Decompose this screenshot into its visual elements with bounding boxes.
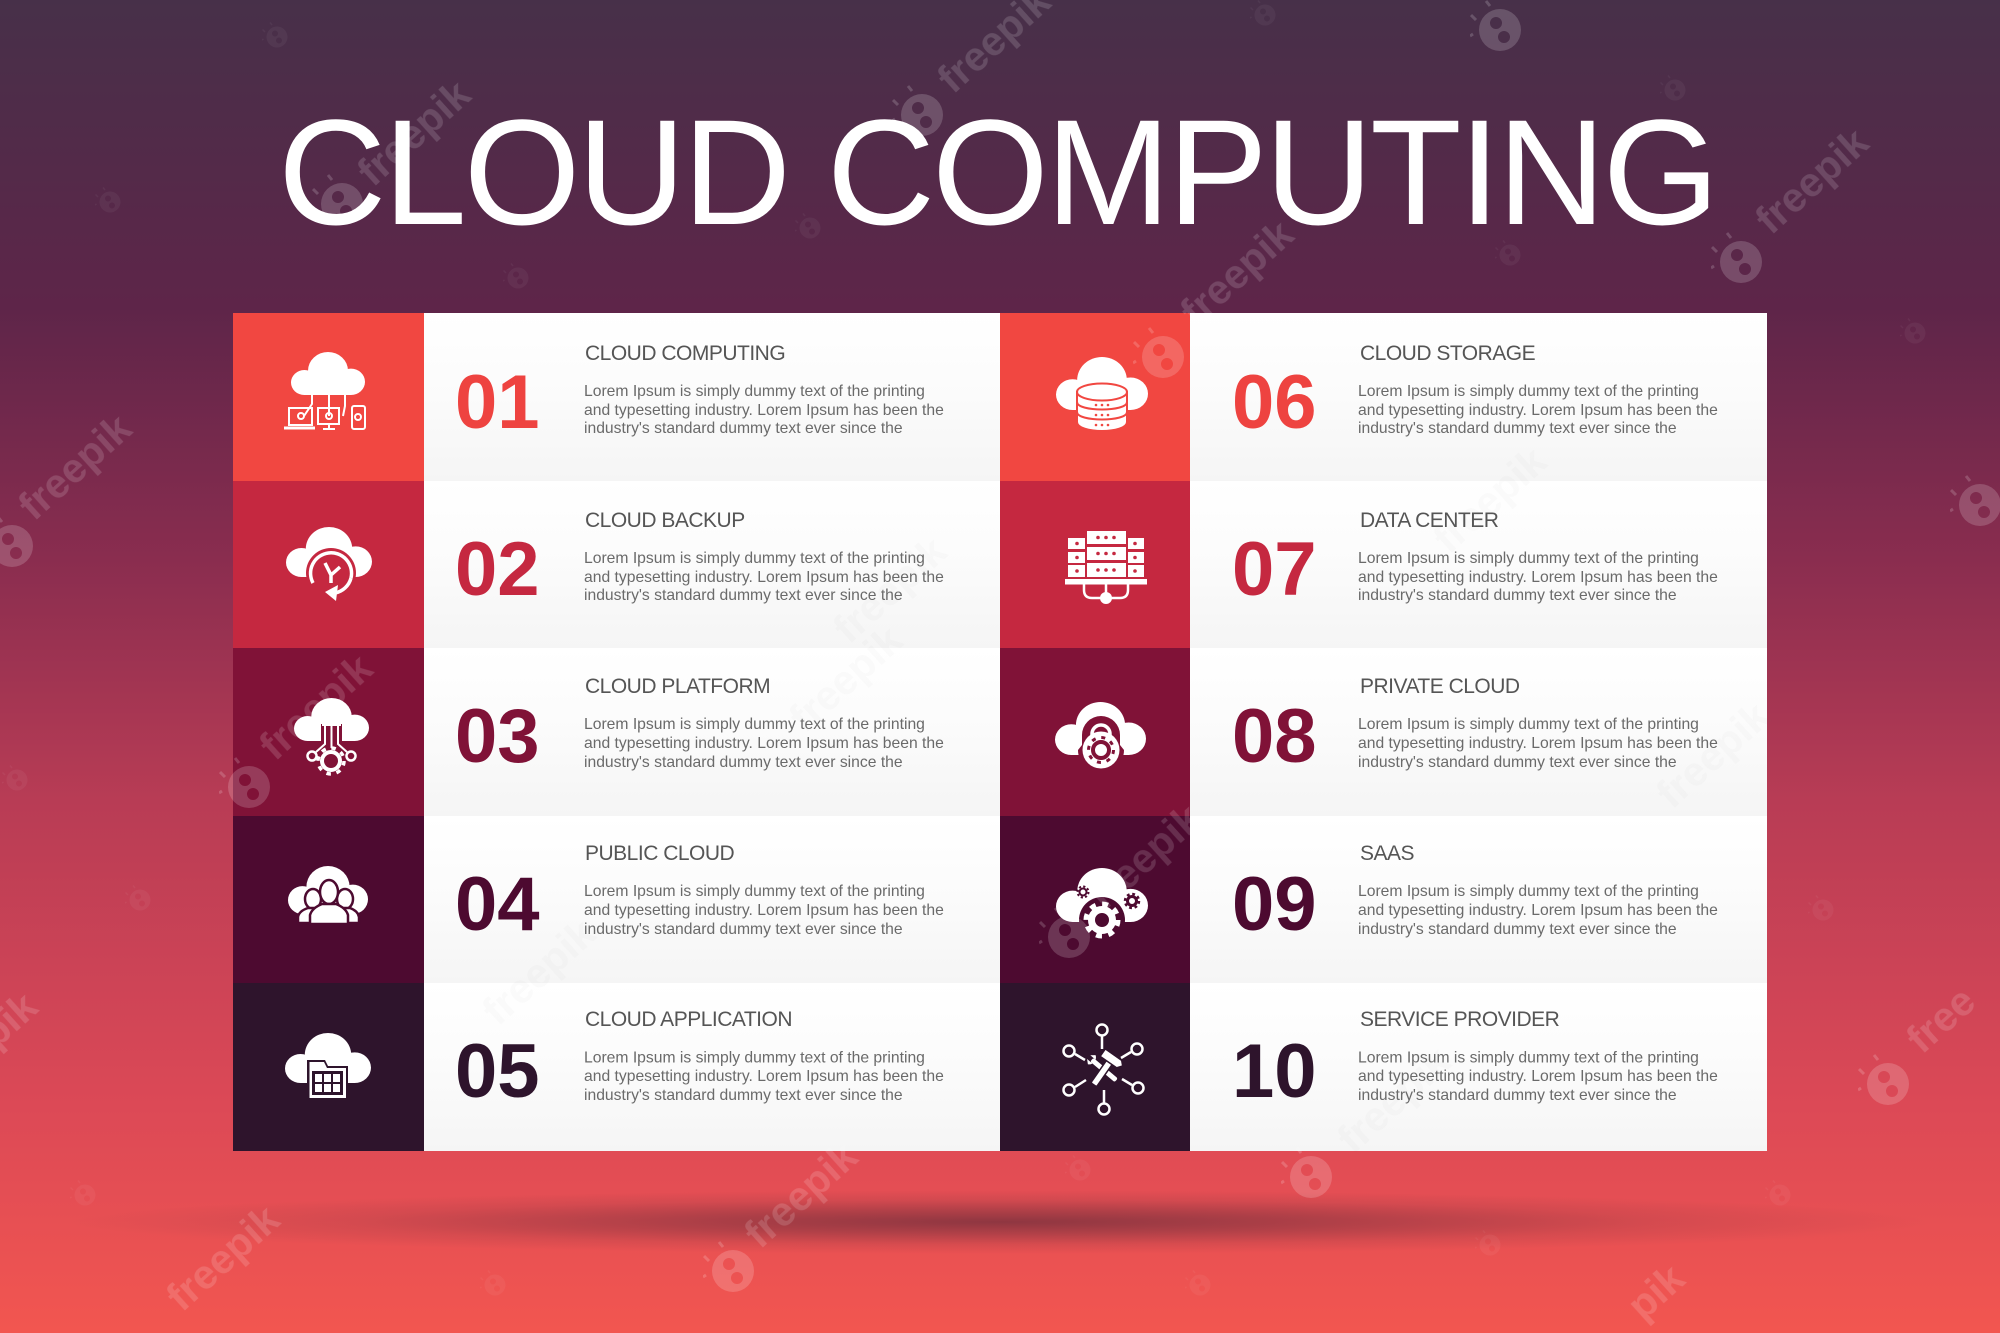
heading: SERVICE PROVIDER [1360,1008,1560,1031]
heading: CLOUD STORAGE [1360,342,1536,365]
row 03: cloud platform [233,648,1000,816]
body text: and typesetting industry. Lorem Ipsum has been the [1358,1068,1718,1085]
stock watermark overlay: freepik [1647,692,1778,817]
number 04: 04 [455,862,540,947]
body text: Lorem Ipsum is simply dummy text of the printing [584,1050,925,1066]
body text: Lorem Ipsum is simply dummy text of the printing [1358,383,1699,400]
row 10: service provider [1000,983,1767,1151]
body text: Lorem Ipsum is simply dummy text of the printing [1358,883,1699,900]
stock watermark overlay: freepik [473,909,604,1034]
row 04: public cloud [233,816,1000,983]
wrench [1085,1053,1120,1085]
stock watermark overlay: freepik [824,527,955,652]
body text: industry's standard dummy text ever since the [1358,754,1677,771]
body text: industry's standard dummy text ever since the [1358,921,1677,938]
stock watermark overlay: free [1897,977,1984,1062]
stock watermark overlay: freepik [1746,118,1877,243]
stock watermark overlay: freepik [1171,210,1302,335]
icon: cloud with people [288,866,368,924]
number 10: 10 [1232,1029,1317,1114]
number 08: 08 [1232,694,1317,779]
icon: cloud with database [1056,357,1148,431]
stock watermark overlay: freepik [348,70,479,195]
number 01: 01 [455,360,540,445]
heading: CLOUD APPLICATION [585,1008,792,1031]
row 05: cloud application [233,983,1000,1151]
number 03: 03 [455,694,540,779]
body text: Lorem Ipsum is simply dummy text of the printing [584,383,925,400]
stock watermark overlay: freepik [735,1132,866,1257]
stock watermark overlay: freepik [9,404,140,529]
row 08: private cloud [1000,648,1767,816]
body text: and typesetting industry. Lorem Ipsum has been the [584,1068,944,1085]
hammer [1085,1049,1125,1092]
icon: cloud with clock [286,527,372,601]
body text: and typesetting industry. Lorem Ipsum has been the [1358,902,1718,919]
floor shadow [70,1190,1930,1254]
title: CLOUD COMPUTING [278,88,1716,256]
stock watermark overlay: freepik [250,644,381,769]
body text: industry's standard dummy text ever since the [1358,1087,1677,1104]
body text: and typesetting industry. Lorem Ipsum has been the [1358,402,1718,419]
heading: CLOUD BACKUP [585,509,745,532]
body text: industry's standard dummy text ever since the [584,587,903,604]
number 07: 07 [1232,527,1317,612]
body text: and typesetting industry. Lorem Ipsum has been the [584,569,944,586]
number 02: 02 [455,527,540,612]
body text: industry's standard dummy text ever since the [1358,420,1677,437]
body text: industry's standard dummy text ever since the [584,1087,903,1104]
body text: industry's standard dummy text ever since the [1358,587,1677,604]
row 09: saas [1000,816,1767,983]
body text: and typesetting industry. Lorem Ipsum has been the [584,402,944,419]
body text: and typesetting industry. Lorem Ipsum has been the [584,902,944,919]
icon: cloud with devices [284,352,365,429]
body text: and typesetting industry. Lorem Ipsum has been the [1358,735,1718,752]
heading: DATA CENTER [1360,509,1499,532]
body text: Lorem Ipsum is simply dummy text of the printing [584,716,925,733]
stock watermark overlay: freepik [780,616,911,741]
body text: Lorem Ipsum is simply dummy text of the printing [584,550,925,567]
row 06: cloud storage [1000,313,1767,481]
heading: SAAS [1360,842,1415,865]
icon: server racks [1065,531,1147,604]
heading: PRIVATE CLOUD [1360,675,1520,698]
stock watermark overlay: pik [1618,1255,1693,1329]
body text: Lorem Ipsum is simply dummy text of the printing [1358,716,1699,733]
body text: Lorem Ipsum is simply dummy text of the printing [1358,550,1699,567]
number 09: 09 [1232,862,1317,947]
heading: CLOUD COMPUTING [585,342,785,365]
icon: tools with radiating nodes [1064,1024,1144,1114]
stock watermark overlay: freepik [1328,1037,1459,1162]
number 06: 06 [1232,360,1317,445]
body text: and typesetting industry. Lorem Ipsum has been the [1358,569,1718,586]
row 07: data center [1000,481,1767,648]
row 02: cloud backup [233,481,1000,648]
stock watermark overlay: freepik [1079,794,1210,919]
body text: industry's standard dummy text ever since the [584,921,903,938]
row 01: cloud computing [233,313,1000,481]
icon: cloud with padlock [1055,702,1146,773]
stock watermark overlay: freepik [157,1195,288,1320]
infographic panel [233,313,1767,1151]
body text: and typesetting industry. Lorem Ipsum has been the [584,735,944,752]
body text: industry's standard dummy text ever since the [584,754,903,771]
icon: cloud with application grid [285,1033,371,1101]
icon: cloud with circuit gear [294,698,369,774]
body text: Lorem Ipsum is simply dummy text of the printing [1358,1050,1699,1066]
body text: industry's standard dummy text ever since the [584,420,903,437]
icon: cloud with gears [1056,868,1148,943]
heading: CLOUD PLATFORM [585,675,770,698]
heading: PUBLIC CLOUD [585,842,735,865]
number 05: 05 [455,1029,540,1114]
stock watermark overlay: freepik [1424,437,1555,562]
body text: Lorem Ipsum is simply dummy text of the printing [584,883,925,900]
